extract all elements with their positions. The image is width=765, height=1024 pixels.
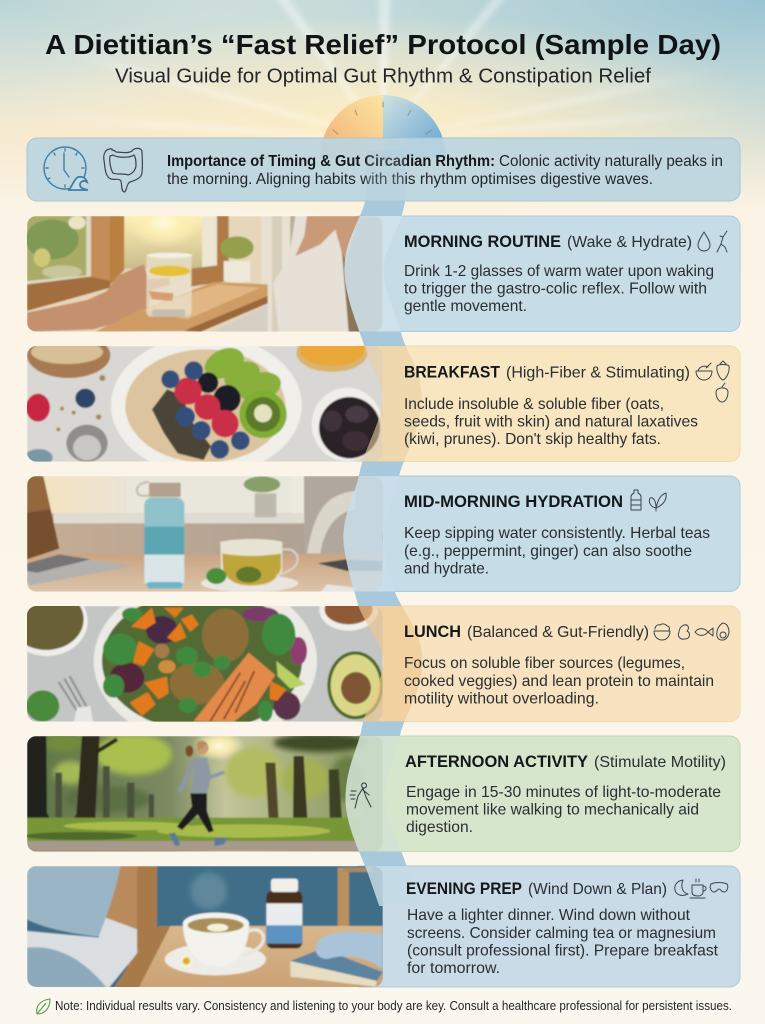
photo: morning window and water glass (27, 216, 382, 332)
photo: salmon lentil lunch plate (27, 606, 383, 722)
panel: lunch text card (350, 606, 740, 722)
text: lunch (404, 622, 729, 708)
text: lunch: motility without overloading. (404, 690, 599, 708)
icon: leaf sprig (649, 493, 666, 511)
icon: fish (695, 628, 713, 636)
text: breakfast: seeds, fruit with skin) and natural laxatives (404, 414, 698, 430)
panel: breakfast text card (350, 346, 740, 462)
title: A Dietitian’s “Fast Relief” Protocol (Sample Day) (45, 29, 721, 60)
intro text: the morning. Aligning habits with this rhythm optimises digestive waves. (167, 171, 653, 188)
text: afternoon activity: movement like walking to mechanically aid (406, 802, 699, 818)
text: evening prep: EVENING PREP (406, 879, 522, 898)
subtitle: Visual Guide for Optimal Gut Rhythm & Constipation Relief (115, 66, 651, 88)
panel: importance of timing (27, 138, 740, 201)
intro text: Colonic activity naturally peaks in (499, 153, 723, 170)
icon: legumes (678, 625, 689, 639)
text: afternoon activity: Engage in 15-30 minutes of light-to-moderate (406, 784, 721, 801)
text: breakfast: (kiwi, prunes). Don't skip healthy fats. (404, 431, 661, 448)
text: afternoon activity: digestion. (406, 819, 473, 836)
text: afternoon activity (405, 752, 726, 836)
text: evening prep: (Wind Down & Plan) (528, 881, 667, 898)
text: evening prep (406, 879, 728, 977)
text: morning routine: gentle movement. (404, 298, 527, 315)
text: morning routine: (Wake & Hydrate) (567, 234, 692, 251)
icon: apple (716, 383, 728, 402)
icon: intestines (104, 148, 142, 192)
icon: bowl (696, 363, 712, 380)
text: evening prep: (consult professional first). Prepare breakfast (407, 942, 719, 960)
icon: sleep mask (710, 882, 728, 892)
panel: morning routine text card (350, 216, 740, 332)
text: evening prep: Have a lighter dinner. Wind down without (407, 907, 691, 924)
footer note with leaf icon: Note: Individual results vary. Consistency and listening to your body are key. Consult a healthcare professional for persistent issues. (55, 999, 732, 1013)
icon: strawberry (717, 361, 729, 380)
panel: afternoon text card (350, 736, 740, 852)
intro text (167, 153, 723, 188)
text: morning routine: Drink 1-2 glasses of warm water upon waking (404, 263, 714, 280)
icon: leaf (37, 999, 50, 1014)
text: afternoon activity: AFTERNOON ACTIVITY (405, 752, 589, 771)
intro text: Importance of Timing & Gut Circadian Rhythm: (167, 153, 495, 170)
text: lunch: LUNCH (404, 622, 461, 641)
photo: oatmeal breakfast bowl (27, 346, 382, 462)
sun dial clock (320, 95, 446, 158)
icon: water drop (698, 232, 710, 251)
text: morning routine: to trigger the gastro-colic reflex. Follow with (404, 280, 707, 298)
text: mid-morning hydration: MID-MORNING HYDRATION (404, 492, 623, 511)
text: morning routine (404, 231, 727, 315)
wavy ribbon connecting the day (363, 150, 403, 912)
text: breakfast: Include insoluble & soluble fiber (oats, (404, 396, 664, 413)
photo: water bottle and herbal tea (27, 476, 387, 592)
text: afternoon activity: (Stimulate Motility) (594, 754, 726, 771)
icon: stretching person (717, 231, 727, 252)
photo: evening tea and magnesium bedside (27, 866, 387, 988)
icon: tea cup (690, 879, 706, 898)
panel: evening text card (350, 866, 740, 987)
panel: mid-morning text card (350, 476, 740, 592)
photo: woman walking in park (24, 731, 387, 852)
icon: salad bowl (654, 624, 670, 640)
icon: moon (675, 880, 688, 895)
text: lunch: cooked veggies) and lean protein to maintain (404, 673, 714, 690)
text: evening prep: screens. Consider calming tea or magnesium (407, 925, 716, 942)
icon: bottle (631, 490, 641, 510)
icon: avocado (717, 623, 729, 640)
text: mid-morning hydration: (e.g., peppermint, ginger) can also soothe (404, 543, 692, 560)
text: evening prep: for tomorrow. (407, 960, 500, 977)
icon: walking person on ribbon (350, 783, 371, 808)
text: morning routine: MORNING ROUTINE (404, 232, 561, 251)
text: lunch: (Balanced & Gut-Friendly) (467, 624, 649, 641)
text: lunch: Focus on soluble fiber sources (legumes, (404, 655, 685, 672)
icon: clock with wave (44, 147, 88, 190)
text: breakfast: BREAKFAST (404, 362, 501, 382)
text: mid-morning hydration: Keep sipping water consistently. Herbal teas (404, 525, 710, 542)
text: breakfast: (High-Fiber & Stimulating) (506, 364, 690, 382)
text: mid-morning hydration: and hydrate. (404, 560, 489, 578)
text: breakfast (404, 361, 729, 448)
text: mid-morning hydration (404, 490, 710, 578)
